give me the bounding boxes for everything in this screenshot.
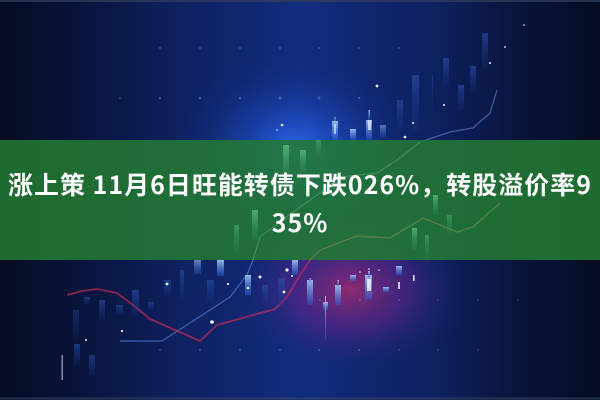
faint grid dots xyxy=(119,47,519,351)
headline: 35% xyxy=(272,204,328,240)
red trend line xyxy=(67,203,500,341)
purple glow xyxy=(230,205,470,375)
headline xyxy=(8,166,592,240)
blue glow xyxy=(170,50,420,250)
green title band xyxy=(0,140,600,260)
dim candlesticks xyxy=(73,33,488,375)
blue trend line xyxy=(120,90,497,341)
white highlights xyxy=(62,24,525,380)
bright candlesticks xyxy=(194,110,402,341)
headline: 涨上策 11月6日旺能转债下跌026%，转股溢价率9 xyxy=(8,166,592,202)
